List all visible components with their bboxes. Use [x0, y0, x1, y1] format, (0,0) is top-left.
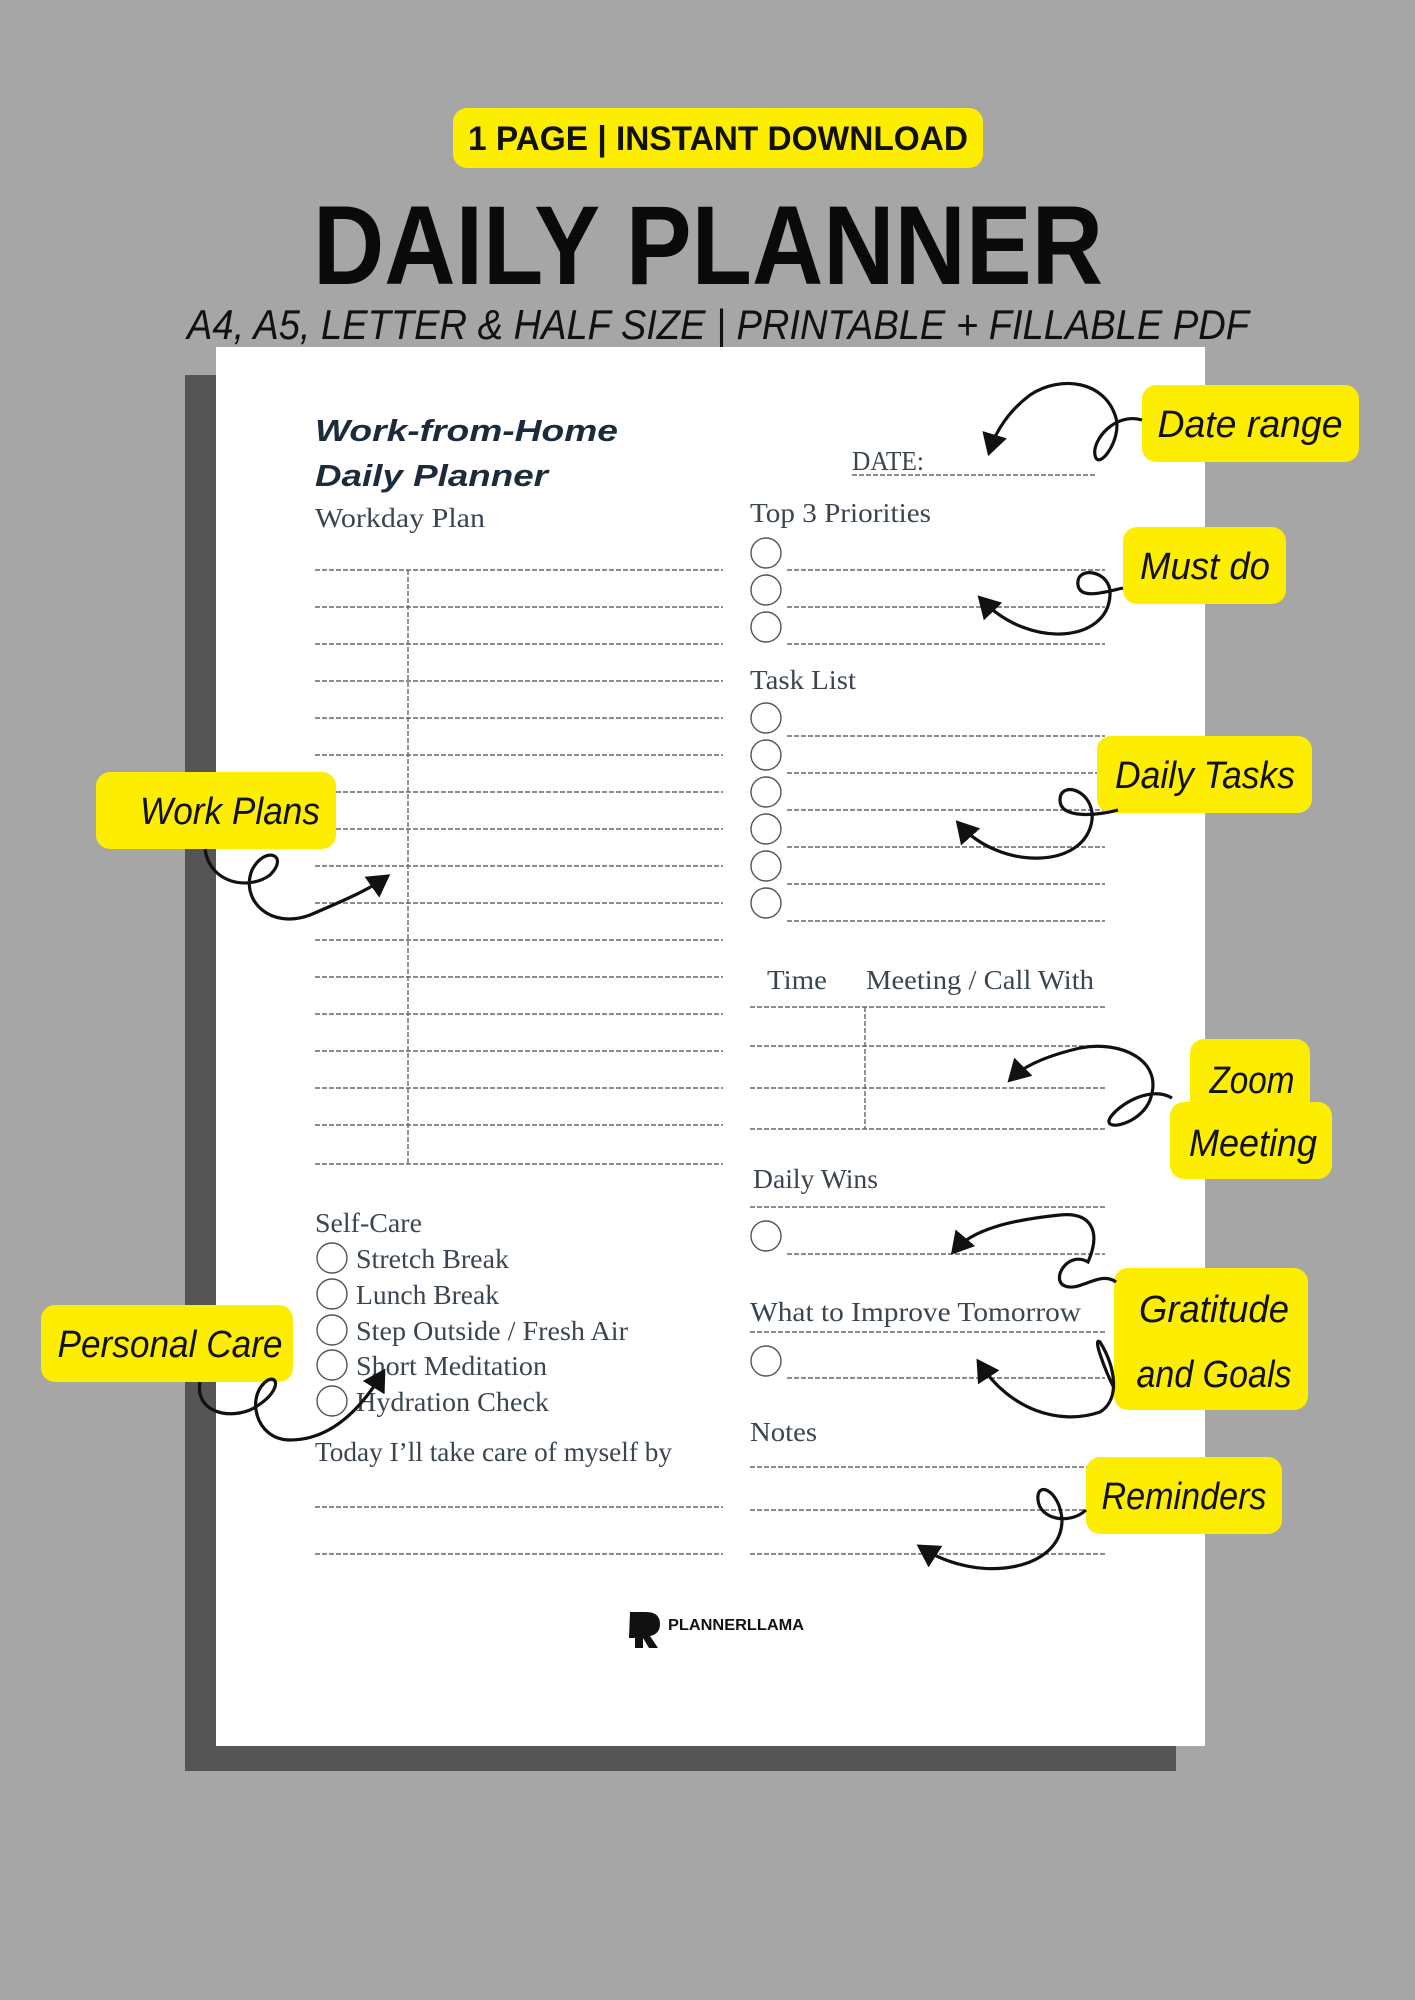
arrow: daily tasks [960, 790, 1118, 858]
callout: date range: Date range [1158, 404, 1342, 446]
section: notes [750, 1417, 1105, 1554]
section: self-care [315, 1208, 723, 1554]
logo: plannerllama [629, 1612, 804, 1648]
callout: reminders [1086, 1457, 1282, 1534]
callout: zoom meeting: Meeting [1189, 1123, 1317, 1165]
callout: work plans: Work Plans [140, 791, 320, 833]
paper shadow [185, 375, 1176, 1771]
callout: daily tasks [1097, 736, 1312, 813]
arrow: gratitude lower [980, 1341, 1114, 1417]
section: self-care: Lunch Break [356, 1280, 500, 1310]
section: self-care: Today I’ll take care of myself by [315, 1437, 673, 1467]
section: workday plan [315, 503, 723, 1164]
section: task list: Task List [750, 665, 857, 695]
planner page [216, 347, 1205, 1746]
planner title [315, 413, 618, 493]
section: meetings: Meeting / Call With [866, 965, 1095, 995]
badge: 1 page instant download: 1 PAGE | INSTANT DOWNLOAD [468, 120, 968, 158]
arrow: work plans [205, 849, 385, 919]
callout: gratitude and goals [1114, 1268, 1308, 1410]
callout: date range [1142, 385, 1359, 462]
section: improve tomorrow [750, 1297, 1105, 1378]
section: self-care: Short Meditation [356, 1351, 548, 1381]
callout: daily tasks: Daily Tasks [1115, 755, 1295, 797]
section: meetings [750, 965, 1105, 1129]
callout: work plans [96, 772, 336, 849]
arrow: must do [982, 573, 1123, 634]
callout: reminders: Reminders [1102, 1476, 1266, 1518]
section: task list [750, 665, 1105, 921]
section: daily wins [750, 1164, 1105, 1254]
badge: 1 page instant download [453, 108, 983, 168]
arrow: personal care [199, 1374, 382, 1440]
callout: gratitude and goals: and Goals [1136, 1354, 1292, 1396]
callout: personal care: Personal Care [58, 1324, 282, 1366]
section: top 3 priorities: Top 3 Priorities [750, 498, 931, 528]
planner title: Work-from-Home [315, 413, 618, 448]
arrow: zoom meeting [1012, 1046, 1172, 1125]
callout: gratitude and goals: Gratitude [1139, 1289, 1289, 1331]
section: self-care: Hydration Check [356, 1387, 550, 1417]
section: self-care: Self-Care [315, 1208, 422, 1238]
date field: DATE: [852, 446, 924, 476]
callout: personal care [41, 1305, 293, 1382]
section: notes: Notes [750, 1417, 817, 1447]
title: DAILY PLANNER [313, 183, 1103, 308]
section: self-care: Stretch Break [356, 1244, 510, 1274]
section: improve tomorrow: What to Improve Tomorrow [750, 1297, 1082, 1327]
section: self-care: Step Outside / Fresh Air [356, 1316, 628, 1346]
subtitle: A4, A5, LETTER & HALF SIZE | PRINTABLE + FILLABLE PDF [184, 301, 1251, 349]
planner title: Daily Planner [315, 458, 550, 493]
section: meetings: Time [767, 965, 827, 995]
arrow: gratitude upper [955, 1215, 1116, 1287]
callout: must do [1123, 527, 1286, 604]
callout: zoom meeting [1170, 1039, 1332, 1179]
section: workday plan: Workday Plan [315, 503, 486, 533]
callout: zoom meeting: Zoom [1209, 1060, 1294, 1102]
arrow: reminders [922, 1490, 1086, 1569]
arrow: date range [990, 383, 1142, 460]
callout: must do: Must do [1140, 546, 1270, 588]
logo: plannerllama: PLANNERLLAMA [668, 1617, 804, 1634]
section: top 3 priorities [750, 498, 1105, 644]
section: daily wins: Daily Wins [753, 1164, 878, 1194]
